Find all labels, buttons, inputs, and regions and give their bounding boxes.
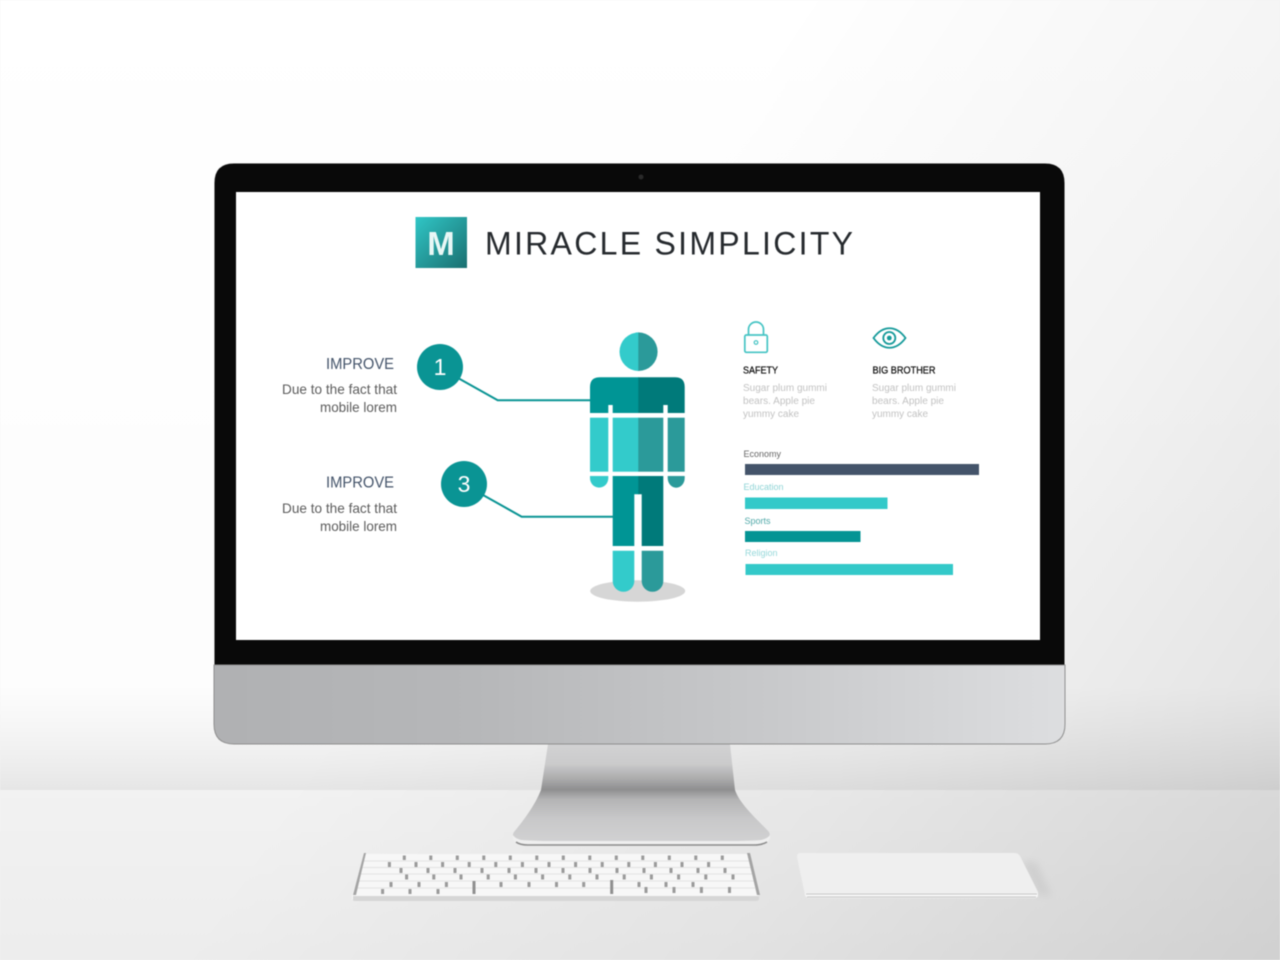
safety text block: bears. Apple pie <box>743 396 815 407</box>
arms and torso <box>590 418 685 472</box>
number badge 3 <box>441 461 487 507</box>
desk surface <box>0 790 1280 960</box>
webcam <box>638 174 644 180</box>
callout 3 text <box>282 474 397 534</box>
hands <box>590 476 685 488</box>
bar: sports: Sports <box>744 516 771 526</box>
connector line 3 <box>483 495 614 517</box>
bar: religion <box>745 548 953 575</box>
number badge 1 <box>417 344 463 390</box>
head <box>619 332 658 371</box>
safety text block <box>743 366 827 420</box>
slide screen <box>236 192 1040 640</box>
upper legs <box>613 476 663 546</box>
monitor chin <box>214 665 1065 744</box>
number badge 3: 3 <box>458 471 470 497</box>
big brother text block <box>872 366 956 420</box>
callout 3 text: mobile lorem <box>320 518 397 534</box>
callout 3 text: IMPROVE <box>326 474 394 492</box>
monitor bezel <box>214 163 1065 665</box>
keyboard <box>352 853 760 901</box>
bar chart <box>744 449 979 575</box>
number badge 1: 1 <box>434 354 446 380</box>
callout 1 text <box>282 356 397 415</box>
bar: education <box>744 482 888 509</box>
trackpad shadow <box>1022 862 1052 896</box>
safety text block: yummy cake <box>743 409 799 420</box>
big brother text block: bears. Apple pie <box>872 396 944 407</box>
big brother text block: BIG BROTHER <box>872 366 936 376</box>
callout 1 text: mobile lorem <box>320 399 397 415</box>
bar: economy: Economy <box>744 449 782 459</box>
bar: economy <box>744 449 979 475</box>
safety text block: SAFETY <box>743 366 778 376</box>
big brother text block: Sugar plum gummi <box>872 383 956 394</box>
ground shadow <box>590 580 685 602</box>
human figure <box>590 332 685 602</box>
bar: sports <box>744 516 860 542</box>
logo badge <box>416 217 467 268</box>
safety text block: Sugar plum gummi <box>743 383 827 394</box>
logo badge: M <box>427 225 455 262</box>
monitor stand <box>513 744 770 845</box>
title: MIRACLE SIMPLICITY <box>485 226 853 262</box>
callout 1 text: Due to the fact that <box>282 381 397 397</box>
icon: lock <box>745 322 767 352</box>
connector line 1 <box>458 378 592 400</box>
shoulders <box>590 377 685 413</box>
callout 1 text: IMPROVE <box>326 356 394 373</box>
monitor <box>214 163 1065 744</box>
bar: education: Education <box>744 482 784 492</box>
big brother text block: yummy cake <box>872 409 928 420</box>
icon: eye <box>874 328 906 348</box>
trackpad <box>797 853 1052 898</box>
bar: religion: Religion <box>745 548 778 558</box>
callout 3 text: Due to the fact that <box>282 500 397 516</box>
lower legs <box>613 551 663 592</box>
